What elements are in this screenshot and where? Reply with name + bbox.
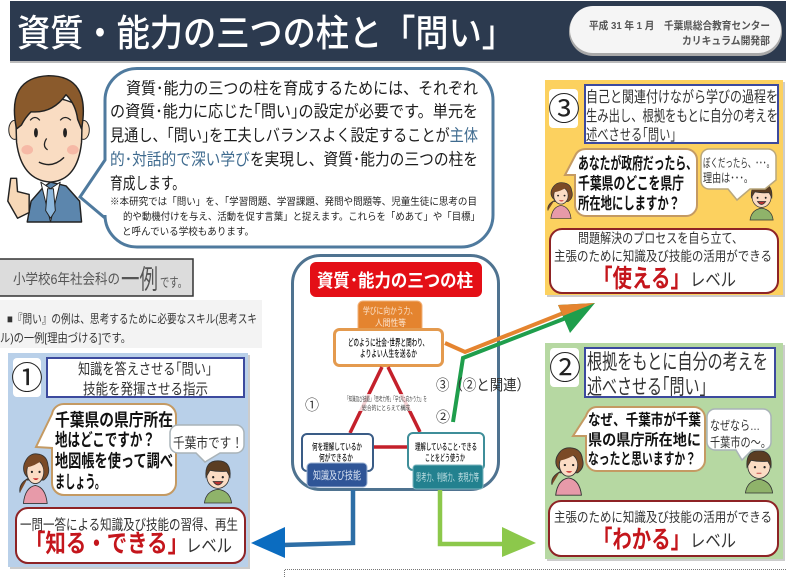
icon: student boy bbox=[204, 461, 232, 503]
humanity label bbox=[358, 301, 422, 337]
diagram heading: 資質･能力の三つの柱 bbox=[317, 271, 473, 291]
knowledge box bbox=[302, 434, 373, 471]
level name: 「知る・できる」 bbox=[25, 530, 188, 558]
arrow: pillars to level 3 bbox=[445, 303, 595, 422]
title bar bbox=[10, 1, 786, 63]
teacher question bubble bbox=[565, 149, 697, 216]
speech bubble: explanation bbox=[80, 68, 493, 247]
teacher question bubble: ましょう。 bbox=[55, 472, 105, 492]
icon: student boy bbox=[750, 184, 773, 220]
icon: teacher woman bbox=[548, 183, 572, 218]
level box bbox=[550, 229, 778, 293]
main explanation text: 育成します。 bbox=[110, 174, 185, 193]
level word: レベル bbox=[690, 270, 736, 290]
level name: 「使える」 bbox=[593, 265, 690, 293]
footnote: ※本研究では「問い」を、「学習問題、学習課題、発問や問題等、児童生徒に思考の目 bbox=[110, 195, 477, 208]
example button bbox=[0, 259, 193, 296]
level name: 「わかる」 bbox=[593, 526, 690, 554]
student answer bubble bbox=[707, 409, 771, 460]
level box bbox=[549, 501, 778, 556]
humanity box: よりよい人生を送るか bbox=[360, 348, 417, 360]
question type heading bbox=[47, 358, 244, 398]
footnote: 的や動機付けを与え、活動を促す言葉」と捉えます。これらを「めあて」や「目標」 bbox=[123, 210, 480, 223]
question type heading: 知識を答えさせる｢問い｣ bbox=[78, 361, 212, 378]
student answer bubble bbox=[701, 149, 776, 200]
teacher question bubble: 千葉県の県庁所在 bbox=[55, 410, 173, 430]
level description: 一問一答による知識及び技能の習得、再生 bbox=[20, 517, 238, 534]
arrow: thinking to level 2 bbox=[440, 490, 536, 557]
icon: teacher woman bbox=[552, 448, 583, 495]
question type heading: 技能を発揮させる指示 bbox=[83, 381, 208, 398]
example button: です。 bbox=[160, 275, 187, 290]
teacher question bubble bbox=[573, 407, 705, 471]
humanity box: どのように社会･世界と関わり、 bbox=[348, 337, 428, 349]
knowledge box: 何ができるか bbox=[319, 452, 353, 463]
label: number 2: ② bbox=[436, 409, 450, 425]
teacher question bubble: なぜ、千葉市が千葉 bbox=[588, 410, 701, 429]
label: number 3 related to number 2: ③（②と関連） bbox=[436, 377, 530, 394]
example button: 一例 bbox=[121, 265, 158, 295]
student answer bubble: なぜなら… bbox=[710, 418, 760, 433]
centre note bbox=[345, 394, 427, 412]
thinking label bbox=[413, 465, 483, 489]
icon: teacher woman bbox=[20, 454, 49, 503]
arrow: knowledge to level 1 bbox=[251, 490, 353, 558]
main explanation text: 見通し、｢問い｣を工夫しバランスよく設定することが主体 bbox=[110, 126, 478, 145]
triangle links bbox=[350, 367, 420, 447]
teacher question bubble: 県の県庁所在地に bbox=[588, 430, 701, 449]
teacher question bubble: 所在地にしますか？ bbox=[578, 194, 680, 213]
number 2: ② bbox=[549, 350, 581, 386]
number 1: ① bbox=[11, 360, 43, 396]
date and organisation pill: カリキュラム開発部 bbox=[682, 34, 770, 47]
humanity label: 学びに向かう力、 bbox=[363, 305, 417, 316]
note on thinking skills: ■『問い』の例は、思考するために必要なスキル(思考スキ bbox=[7, 312, 257, 326]
diagram: three pillars bbox=[292, 256, 498, 490]
footnote: と呼んでいる学校もあります。 bbox=[122, 225, 254, 238]
date and organisation pill bbox=[569, 6, 782, 56]
note on thinking skills: ル)の一例[理由づける]です。 bbox=[0, 331, 131, 345]
icon: teacher pointing thumb up bbox=[8, 76, 89, 222]
footnote bbox=[110, 195, 480, 238]
teacher question bubble: 地図帳を使って調べ bbox=[55, 451, 173, 471]
thinking box: 理解していること･できる bbox=[415, 441, 477, 452]
label: number 1: ① bbox=[305, 397, 319, 413]
student answer bubble: 千葉市の～。 bbox=[710, 435, 771, 450]
main explanation text: の資質･能力に応じた｢問い｣の設定が必要です。単元を bbox=[110, 102, 478, 121]
title: 資質・能力の三つの柱と「問い」 bbox=[17, 13, 515, 54]
dotted footer frame bbox=[284, 570, 786, 577]
thinking box bbox=[408, 433, 484, 470]
level box bbox=[16, 508, 245, 563]
knowledge label bbox=[307, 463, 367, 487]
knowledge box: 何を理解しているか bbox=[312, 441, 362, 452]
example button: 小学校6年社会科の bbox=[13, 271, 120, 287]
date and organisation pill: 平成 31 年 1 月 千葉県総合教育センター bbox=[589, 19, 770, 32]
centre note: 総合的にとらえて構成 bbox=[362, 403, 410, 412]
note on thinking skills bbox=[0, 300, 262, 348]
panel 1: knowing level bbox=[8, 353, 250, 569]
teacher question bubble bbox=[36, 404, 176, 495]
humanity box bbox=[334, 330, 442, 366]
panel 2: understanding level bbox=[545, 343, 785, 561]
level word: レベル bbox=[690, 531, 736, 551]
question type heading: 述べさせる｢問い｣ bbox=[586, 126, 676, 144]
number 3: ③ bbox=[548, 91, 580, 127]
centre note: 「知識及び技能」「思考力等」「学びに向かう力」を bbox=[345, 394, 427, 403]
thinking box: ことをどう使うか bbox=[425, 452, 465, 463]
main explanation text: 的･対話的で深い学びを実現し、資質･能力の三つの柱を bbox=[110, 150, 478, 169]
knowledge label: 知識及び技能 bbox=[313, 468, 361, 482]
student answer bubble: 理由は･･･。 bbox=[703, 171, 753, 185]
teacher question bubble: 地はどこですか？ bbox=[55, 430, 155, 450]
teacher question bubble: あなたが政府だったら、 bbox=[578, 153, 697, 173]
question type heading bbox=[585, 85, 778, 144]
main explanation text: 資質･能力の三つの柱を育成するためには、それぞれ bbox=[126, 79, 478, 98]
level word: レベル bbox=[186, 536, 232, 556]
question type heading bbox=[585, 348, 775, 399]
icon: student thinking bbox=[745, 451, 773, 493]
teacher question bubble: なったと思いますか？ bbox=[588, 450, 696, 468]
thinking label: 思考力、判断力、表現力等 bbox=[416, 471, 479, 484]
teacher question bubble: 千葉県のどこを県庁 bbox=[578, 174, 684, 193]
panel 3: usable level bbox=[545, 80, 785, 297]
student answer bubble bbox=[170, 425, 244, 462]
main explanation text bbox=[110, 79, 478, 193]
diagram heading bbox=[310, 262, 482, 297]
student answer bubble: 千葉市です！ bbox=[173, 435, 243, 451]
level description: 問題解決のプロセスを自ら立て、 bbox=[578, 231, 743, 246]
question type heading: 述べさせる｢問い｣ bbox=[587, 376, 707, 399]
humanity label: 人間性等 bbox=[375, 317, 406, 328]
